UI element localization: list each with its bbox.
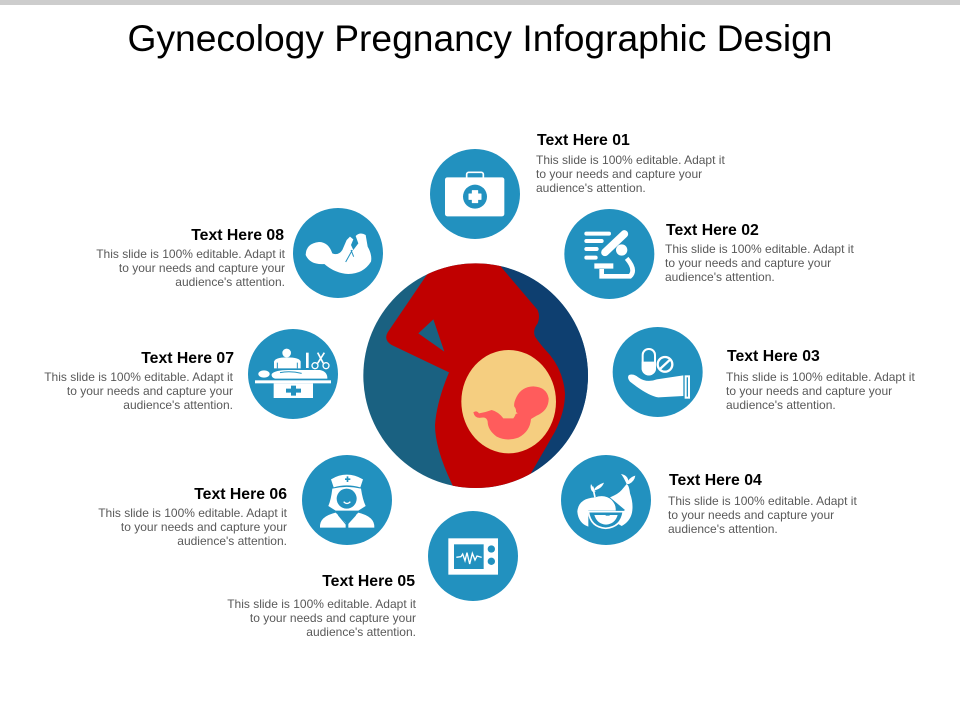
text body 05: audience's attention. (306, 625, 416, 639)
text body 01: This slide is 100% editable. Adapt it (536, 153, 725, 167)
text body 05: to your needs and capture your (250, 611, 416, 625)
text block 06: Text Here 06 (194, 486, 287, 503)
text body 02: audience's attention. (665, 270, 775, 284)
text body 03: This slide is 100% editable. Adapt it (726, 370, 915, 384)
text body 02: This slide is 100% editable. Adapt it (665, 242, 854, 256)
text block 02: Text Here 02 (666, 222, 759, 239)
text block 05: Text Here 05 (322, 573, 415, 590)
text block 04: Text Here 04 (669, 472, 762, 489)
text body 04 (668, 494, 857, 536)
text body 01 (536, 153, 725, 195)
text block 03: Text Here 03 (727, 348, 820, 365)
text body 07: audience's attention. (123, 398, 233, 412)
text block 01: Text Here 01 (537, 132, 630, 149)
text body 06: to your needs and capture your (121, 520, 287, 534)
text body 03 (726, 370, 915, 412)
text body 04: This slide is 100% editable. Adapt it (668, 494, 857, 508)
text body 01: audience's attention. (536, 181, 646, 195)
text body 01: to your needs and capture your (536, 167, 702, 181)
text body 06: audience's attention. (177, 534, 287, 548)
icon: hand with pills (613, 327, 703, 417)
text body 06 (98, 506, 287, 548)
text body 02: to your needs and capture your (665, 256, 831, 270)
title: Gynecology Pregnancy Infographic Design (128, 17, 832, 59)
icon: microscope (564, 209, 654, 299)
central pregnancy illustration (363, 263, 588, 488)
text block 07: Text Here 07 (141, 350, 234, 367)
text body 08: audience's attention. (175, 275, 285, 289)
icon: nurse (302, 455, 392, 545)
text body 03: audience's attention. (726, 398, 836, 412)
icon: fruits (561, 455, 651, 545)
text body 05 (227, 597, 416, 639)
icon: operating table (248, 329, 338, 419)
text body 05: This slide is 100% editable. Adapt it (227, 597, 416, 611)
text body 07: This slide is 100% editable. Adapt it (44, 370, 233, 384)
text body 03: to your needs and capture your (726, 384, 892, 398)
text body 08: This slide is 100% editable. Adapt it (96, 247, 285, 261)
text block 08: Text Here 08 (191, 227, 284, 244)
icon: ultrasound monitor (428, 511, 518, 601)
icon: newborn baby (293, 208, 383, 298)
text body 02 (665, 242, 854, 284)
text body 07 (44, 370, 233, 412)
text body 04: to your needs and capture your (668, 508, 834, 522)
text body 04: audience's attention. (668, 522, 778, 536)
text body 08 (96, 247, 285, 289)
icon: medical kit (430, 149, 520, 239)
text body 08: to your needs and capture your (119, 261, 285, 275)
text body 06: This slide is 100% editable. Adapt it (98, 506, 287, 520)
text body 07: to your needs and capture your (67, 384, 233, 398)
